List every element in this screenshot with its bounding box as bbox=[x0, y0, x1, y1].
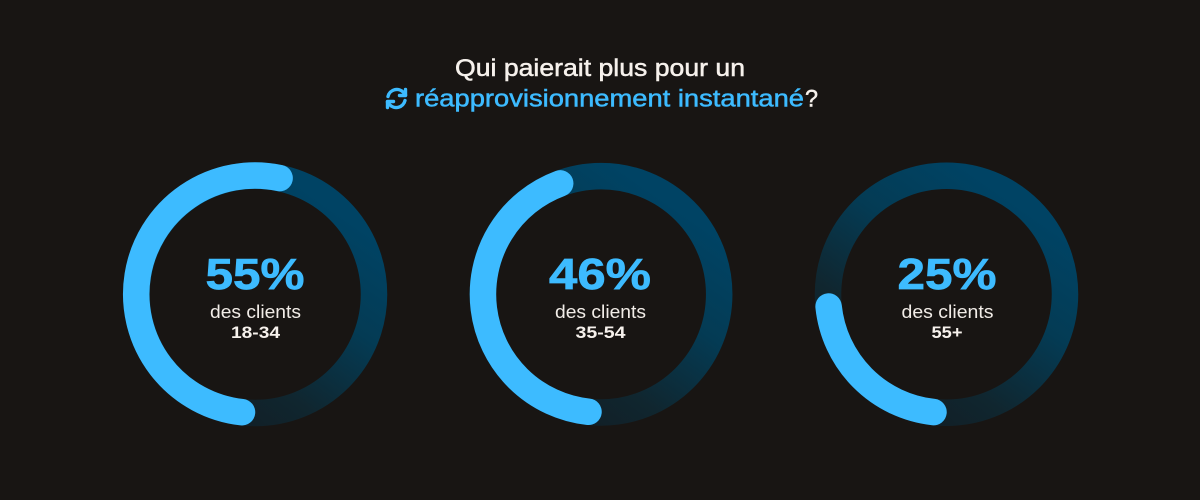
panel: donut 55+ bbox=[828, 176, 1065, 413]
label des clients: des clients bbox=[902, 302, 994, 322]
title line 2 highlight: réapprovisionnement instantané bbox=[415, 86, 804, 112]
ring value 25% bbox=[829, 306, 934, 412]
label des clients: des clients bbox=[210, 302, 301, 322]
ring track bbox=[483, 176, 719, 412]
ring track bbox=[137, 176, 374, 413]
value 55%: 55% bbox=[206, 250, 304, 299]
ring track bbox=[828, 176, 1065, 413]
panel: donut 18-34 bbox=[136, 176, 374, 413]
title question mark: ? bbox=[805, 86, 818, 112]
label 55+: 55+ bbox=[932, 324, 962, 342]
label des clients: des clients bbox=[555, 302, 646, 322]
panel: donut 35-54 bbox=[483, 176, 719, 412]
label 18-34: 18-34 bbox=[231, 324, 281, 342]
icon: refresh arrows bbox=[388, 89, 406, 108]
title bbox=[388, 55, 818, 112]
title line 1: Qui paierait plus pour un bbox=[455, 55, 745, 82]
ring value 55% bbox=[136, 176, 280, 412]
value 25%: 25% bbox=[898, 250, 996, 299]
label 35-54: 35-54 bbox=[576, 324, 626, 342]
ring value 46% bbox=[483, 183, 588, 412]
value 46%: 46% bbox=[549, 250, 651, 299]
